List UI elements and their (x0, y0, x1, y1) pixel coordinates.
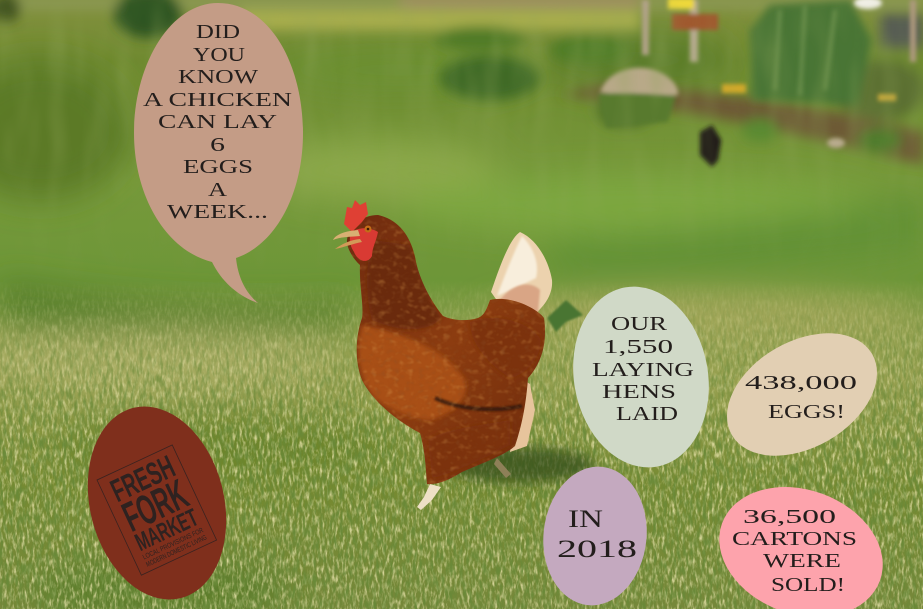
body (347, 215, 545, 484)
oval: 438,000 eggs: 438,000 (745, 372, 857, 394)
oval: 1,550 laying hens: HENS (602, 381, 676, 403)
oval: 36,500 cartons sold: 36,500 (743, 506, 836, 528)
bubble text: CAN LAY (158, 111, 277, 133)
oval: 36,500 cartons sold (701, 465, 901, 609)
eye (364, 226, 372, 232)
feather shading (349, 218, 545, 484)
beak (333, 230, 360, 240)
rear white fluff (510, 378, 535, 452)
bubble text: EGGS (183, 156, 253, 178)
oval: 438,000 eggs (705, 308, 899, 481)
oval: in 2018: IN (568, 506, 603, 533)
logo: FRESH (105, 448, 180, 509)
bubble text: WEEK... (167, 201, 268, 223)
bubble text: A (208, 179, 228, 201)
oval: 1,550 laying hens: LAYING (592, 359, 694, 381)
logo: FORK (115, 470, 195, 541)
oval: 36,500 cartons sold: CARTONS (732, 528, 857, 550)
oval: in 2018: 2018 (557, 536, 637, 563)
speech bubble: did you know (134, 3, 303, 303)
logo: MARKET (131, 504, 203, 557)
oval: 36,500 cartons sold: SOLD! (771, 574, 845, 596)
bubble text: DID (196, 21, 240, 43)
face and wattle (350, 228, 378, 261)
logo oval: fresh fork market (68, 392, 246, 609)
oval: 1,550 laying hens: 1,550 (603, 336, 673, 358)
oval: 36,500 cartons sold: WERE (763, 550, 841, 572)
bubble text: 6 (210, 134, 225, 156)
logo: MODERN DOMESTIC LIVING (145, 534, 208, 569)
bubble text: KNOW (178, 66, 258, 88)
logo (97, 445, 217, 575)
legs (417, 484, 441, 510)
oval: 1,550 laying hens: OUR (611, 313, 668, 335)
oval: 438,000 eggs: EGGS! (768, 401, 845, 423)
hen (333, 200, 555, 510)
comb (344, 200, 368, 232)
logo: LOCAL PROVISIONS FOR (142, 527, 205, 561)
shadow under hen (445, 447, 595, 483)
bubble text (143, 21, 292, 223)
bubble text: YOU (193, 44, 246, 66)
oval: 1,550 laying hens (559, 276, 723, 478)
bubble text: A CHICKEN (143, 89, 292, 111)
oval: in 2018 (537, 461, 653, 609)
oval: 1,550 laying hens: LAID (616, 403, 678, 425)
tail feathers (491, 232, 552, 312)
small leaf behind hen (547, 300, 583, 332)
